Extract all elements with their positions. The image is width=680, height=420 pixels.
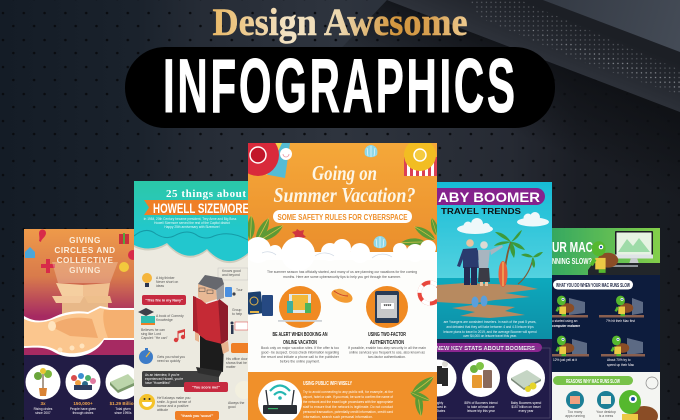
red label: the fire: "This fire in my Navy" bbox=[145, 298, 183, 302]
icon: presentation board bbox=[230, 322, 248, 334]
section: reasons bbox=[552, 372, 660, 420]
heading: 25 things about: 25 things about bbox=[166, 188, 246, 200]
stat text: roughly bbox=[433, 401, 444, 405]
right side snippets: His office door bbox=[226, 357, 248, 361]
right side snippets: good bbox=[228, 405, 236, 409]
heading: public wifi: USING PUBLIC WIFI WISELY bbox=[303, 381, 352, 387]
pill: what you do: WHAT YOU DO WHEN YOUR MAC RUNS SLOW bbox=[556, 283, 630, 289]
panel: howell sizemore bbox=[134, 181, 253, 420]
text: public wifi: personal transaction, potentially credit information, credit card bbox=[303, 410, 393, 414]
text: survey results: 7% hit their Mac first bbox=[606, 319, 635, 323]
palm leaves bbox=[409, 376, 437, 416]
heading: going on summer vacation bbox=[274, 161, 416, 207]
icon: turtle on desk bbox=[590, 241, 618, 273]
heading: booking vacation: BE ALERT WHEN BOOKING AN bbox=[272, 332, 328, 338]
dark quote box: have "Howellified" bbox=[145, 381, 170, 385]
icon: stopwatch bbox=[139, 348, 153, 364]
stat labels: $1.29 Billion bbox=[110, 401, 137, 406]
ribbon heading: Howell Sizemore: HOWELL SIZEMORE bbox=[153, 201, 249, 216]
text: public wifi: airport, hotel or cafe. If you must, be sure to confirm the name of bbox=[303, 395, 393, 399]
text: believes bbox=[141, 328, 169, 340]
icon: light bulb bbox=[142, 273, 152, 287]
section: public wifi bbox=[248, 372, 437, 420]
text: booking vacation: the resort and initiate a phone call to the publisher bbox=[261, 355, 340, 359]
box illustration bbox=[52, 262, 118, 316]
text: tells you bbox=[157, 355, 185, 363]
section: reasons: apps running bbox=[565, 414, 585, 418]
icon: starfish bbox=[292, 229, 306, 242]
icon: phone authentication bbox=[366, 286, 408, 328]
stat text: since 1990s bbox=[114, 411, 132, 415]
icon: phone authentication: **** bbox=[384, 304, 391, 310]
pill heading: key stats bbox=[425, 343, 542, 352]
panel: mac running slow bbox=[552, 228, 660, 420]
stat text: since 2007 bbox=[35, 411, 51, 415]
cloud shadows bbox=[262, 252, 392, 258]
text: humor: He'll always make you bbox=[157, 396, 191, 400]
palm tree bbox=[494, 230, 543, 285]
text: believes: sing like Lord bbox=[141, 332, 161, 336]
section: reasons: Your desktop bbox=[596, 410, 616, 414]
elderly couple bbox=[457, 239, 503, 286]
heading: two-factor: AUTHENTICATION bbox=[370, 340, 404, 346]
monitor and desk bbox=[588, 231, 660, 275]
cloud border bbox=[245, 237, 437, 271]
heading: giving circles bbox=[54, 236, 116, 275]
palm leaves bbox=[243, 215, 438, 250]
heading: going on summer vacation: Going on bbox=[312, 161, 377, 185]
title pill bbox=[125, 44, 555, 129]
text: tells you: need so quickly bbox=[157, 359, 181, 363]
pill heading: baby boomer: ABY BOOMER bbox=[438, 189, 540, 205]
text: public wifi: information, search such personal information. bbox=[303, 415, 373, 419]
text: survey results: u started using an bbox=[552, 319, 578, 323]
section: reasons: REASONS WHY MAC RUNS SLOW bbox=[566, 379, 620, 385]
icon: straw hat bbox=[330, 287, 354, 305]
stat text: produced in bbox=[430, 405, 447, 409]
red label: more me: "You score me!" bbox=[192, 386, 220, 390]
stat text: every year bbox=[519, 409, 534, 413]
dark quote box bbox=[142, 371, 219, 387]
panel: baby boomer bbox=[420, 182, 552, 420]
flip flops bbox=[472, 296, 488, 308]
clouds bbox=[457, 212, 549, 234]
stat text: the States bbox=[431, 409, 446, 413]
dark quote box: As an interview, If you're bbox=[145, 373, 180, 377]
heading: two-factor bbox=[368, 332, 406, 346]
diagonal band bbox=[330, 0, 680, 200]
stat text: Total given bbox=[115, 407, 131, 411]
text: survey results: computer malware bbox=[552, 324, 580, 328]
stat text: 88% of Boomers intend bbox=[464, 401, 498, 405]
stat labels: 3x bbox=[40, 401, 46, 406]
icon: books bbox=[138, 308, 155, 325]
heading: giving circles: GIVING bbox=[69, 236, 101, 245]
text: survey results: speed up their Mac bbox=[607, 363, 635, 367]
text: two-factor: online services you frequent to use, also known as bbox=[349, 350, 425, 354]
text: two-factor: If possible, enable two-step security in all the main bbox=[348, 346, 426, 350]
icon: shell bbox=[374, 236, 386, 248]
right side snippets: to help bbox=[232, 312, 242, 316]
stat circles bbox=[26, 364, 140, 400]
red label: the fire bbox=[142, 295, 186, 305]
stat labels: 150,000+ bbox=[73, 401, 93, 406]
stat circles bbox=[420, 359, 545, 397]
icon: shell bbox=[365, 145, 377, 157]
pill: what you do bbox=[553, 280, 633, 290]
heading: giving circles: COLLECTIVE bbox=[57, 256, 113, 265]
text: survey results bbox=[552, 319, 635, 367]
text: humor: attitude bbox=[157, 408, 168, 412]
cloud header bbox=[134, 181, 248, 263]
text: knowledge: A book of Comedy bbox=[156, 314, 184, 318]
stat labels bbox=[40, 402, 134, 406]
right side snippets: Group bbox=[232, 308, 242, 312]
text: public wifi bbox=[303, 390, 393, 419]
icon: passports bbox=[246, 291, 273, 316]
heading: your mac bbox=[552, 242, 593, 264]
red label: more me bbox=[184, 382, 228, 392]
right side snippets: Tour bbox=[236, 288, 243, 292]
heading: your mac: NNING SLOW? bbox=[552, 257, 592, 266]
text: public wifi: Try to avoid connecting to any public wifi, for example, at the bbox=[303, 390, 393, 394]
right side snippets: and beyond bbox=[222, 273, 240, 277]
text: bulb: Never short on bbox=[156, 280, 178, 284]
orange label bbox=[175, 411, 219, 420]
icon: phone and flag bbox=[225, 287, 236, 297]
text: booking vacation bbox=[261, 346, 340, 364]
icon: music note bbox=[174, 329, 185, 342]
intro text: are Youngers are consistent travelers. In each of the past 5 years, bbox=[444, 320, 537, 324]
intro text: In 1984, 20th Century became president, Trey Anne and Big Boss bbox=[144, 217, 237, 221]
text: two-factor: two-factor authentication. bbox=[368, 355, 406, 359]
stat text: leisure trip this year bbox=[467, 409, 496, 413]
intro text: months. Here are some cybersecurity tips to help you get through the summer. bbox=[283, 275, 401, 279]
text: survey results: About 70% try to bbox=[607, 358, 631, 362]
dark quote box: experienced Howell, you're bbox=[145, 377, 183, 381]
text: booking vacation: before the online payment. bbox=[280, 360, 320, 364]
icon: lifebuoy bbox=[420, 282, 440, 304]
icon: wifi router bbox=[258, 380, 302, 420]
right side snippets: matter bbox=[226, 365, 236, 369]
stat text: $157 billion on travel bbox=[511, 405, 541, 409]
text: booking vacation: Book only on major vacation sites. If the offer is too bbox=[261, 346, 339, 350]
text: bulb: A big thinker bbox=[156, 276, 176, 280]
icon: smile bbox=[139, 394, 155, 410]
pill heading: key stats: NEW KEY STATS ABOUT BOOMERS bbox=[436, 346, 535, 352]
orange note bbox=[231, 343, 248, 353]
title: Infographics: INFOGRAPHICS bbox=[163, 44, 518, 129]
heading: giving circles: GIVING bbox=[69, 266, 101, 275]
ribbon heading: Howell Sizemore bbox=[144, 200, 249, 216]
heading: booking vacation bbox=[272, 332, 328, 346]
text: tells you: Gets you what you bbox=[157, 355, 185, 359]
right side snippets bbox=[218, 268, 248, 409]
right side snippets: shows that he bbox=[226, 361, 247, 365]
text: knowledge bbox=[156, 314, 184, 322]
icons: gifts and coins bbox=[25, 230, 138, 273]
turtles at desks bbox=[552, 296, 645, 356]
text: bulb bbox=[156, 276, 178, 287]
right side snippets: Always the bbox=[228, 401, 245, 405]
text: public wifi: staff to ensure that the network is legitimate. Do not conduct bbox=[303, 405, 393, 409]
beach umbrella and towel: red bbox=[237, 134, 292, 178]
heading: going on summer vacation: Summer Vacation? bbox=[274, 183, 416, 207]
stat text: Rising circles bbox=[34, 407, 53, 411]
intro text: and debated that they will take between 4 and 4.5 leisure trips bbox=[446, 325, 534, 329]
text: humor bbox=[157, 396, 191, 412]
stat text: to take at least one bbox=[468, 405, 495, 409]
right side snippets: Knows good bbox=[222, 269, 241, 273]
panel: giving circles bbox=[24, 229, 140, 420]
text: humor: humor and a positive bbox=[157, 404, 189, 408]
intro text bbox=[443, 320, 537, 338]
handshake bbox=[24, 306, 135, 357]
island bbox=[437, 283, 538, 318]
text: booking vacation: good - be suspect. Cross check information regarding bbox=[261, 350, 339, 354]
text: two-factor bbox=[348, 346, 426, 359]
section: reasons: is a mess bbox=[599, 414, 613, 418]
text: humor: smile. A good sense of bbox=[157, 400, 191, 404]
intro text bbox=[267, 270, 417, 279]
stat text bbox=[34, 407, 132, 415]
icon: big turtle bbox=[619, 390, 658, 420]
heading: your mac: UR MAC bbox=[552, 239, 593, 256]
section: reasons: Too many bbox=[568, 410, 583, 414]
intro text: leisure plans to travel in 2019, and the average Boomer will spend bbox=[443, 330, 537, 334]
intro text bbox=[144, 217, 237, 229]
person illustration bbox=[193, 275, 229, 377]
heading: giving circles: CIRCLES AND bbox=[54, 246, 116, 255]
text: believes: Capulet: "He can" bbox=[141, 336, 169, 340]
stat text bbox=[430, 401, 541, 413]
text: public wifi: the network and the exact login procedures with the appropriate bbox=[303, 400, 393, 404]
title: Design Awesome: Design Awesome bbox=[212, 1, 468, 44]
surfboard bbox=[498, 261, 508, 287]
heading: travel trends: TRAVEL TRENDS bbox=[441, 206, 521, 216]
stat text: People have given bbox=[70, 407, 96, 411]
pill: safety rules bbox=[273, 210, 412, 223]
icon: laptop hotel bbox=[278, 286, 322, 328]
orange label: "thank you 'scout'" bbox=[181, 414, 214, 418]
text: believes: Believes he can bbox=[141, 328, 165, 332]
heading: two-factor: USING TWO-FACTOR bbox=[368, 332, 406, 338]
intro text: Happy 25th anniversary with Sizemore! bbox=[164, 225, 220, 229]
text: survey results: 12% just yell at it bbox=[553, 358, 577, 362]
stat text: through circles bbox=[73, 411, 94, 415]
beach umbrella and towel: yellow bbox=[404, 139, 437, 176]
stat text: Baby Boomers spend bbox=[511, 401, 541, 405]
intro text: over $4,000 on leisure travel this year. bbox=[463, 334, 517, 338]
text: knowledge: Knowledge bbox=[156, 318, 173, 322]
stat box border bbox=[430, 348, 550, 418]
pill: safety rules: SOME SAFETY RULES FOR CYBERSPACE bbox=[278, 212, 408, 222]
icon: grey circle bbox=[235, 381, 253, 399]
intro text: The summer season has officially started, and many of us are planning our vacations for the coming bbox=[267, 270, 417, 274]
heading: booking vacation: ONLINE VACATION bbox=[283, 340, 317, 346]
intro text: Howell Sizemore served the rest of the Capitol district bbox=[154, 221, 230, 225]
panel: summer vacation bbox=[237, 134, 440, 420]
text: bulb: ideas bbox=[156, 284, 164, 288]
